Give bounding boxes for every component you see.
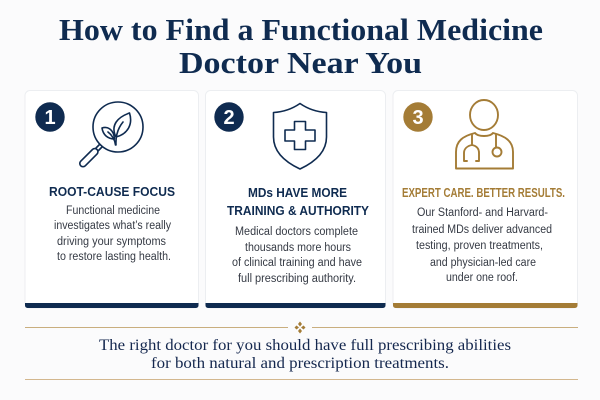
card background [393, 90, 578, 308]
number badge 2: 2 [223, 107, 235, 129]
number badge 1: 1 [44, 107, 56, 129]
number badge 3 [403, 102, 433, 132]
title: Doctor Near You [179, 45, 422, 80]
closing statement: The right doctor for you should have full prescribing abilities [99, 337, 511, 354]
body text: Medical doctors complete [235, 226, 358, 238]
body text [412, 207, 552, 284]
closing statement: for both natural and prescription treatments. [151, 355, 449, 372]
body text: full prescribing authority. [238, 273, 356, 285]
heading: TRAINING & AUTHORITY [227, 204, 370, 218]
body text: and physician-led care [430, 257, 536, 269]
body text: thousands more hours [245, 242, 351, 254]
body text: investigates what’s really [54, 220, 171, 232]
heading: ROOT-CAUSE FOCUS [49, 185, 175, 199]
body text [232, 226, 362, 285]
card background [25, 90, 198, 308]
icon: ornament diamond [294, 322, 306, 334]
body text: trained MDs deliver advanced [412, 224, 552, 236]
body text: Functional medicine [66, 205, 160, 217]
heading: MDs HAVE MORE [248, 186, 347, 200]
body text: to restore lasting health. [57, 251, 171, 263]
title [59, 12, 543, 80]
card bottom bar [25, 303, 198, 308]
card background [206, 90, 386, 308]
body text: Our Stanford- and Harvard- [417, 207, 548, 219]
number badge 1 [35, 102, 65, 132]
body text: testing, proven treatments, [416, 240, 543, 252]
card bottom bar [393, 303, 578, 308]
closing statement [99, 337, 511, 372]
number badge 3: 3 [412, 107, 424, 129]
panel: expert care [393, 90, 578, 308]
body text: of clinical training and have [232, 257, 362, 269]
icon: magnifying glass with leaves [78, 102, 143, 168]
body text: driving your symptoms [57, 236, 166, 248]
panel: MDs have more training [206, 90, 386, 308]
icon: doctor with stethoscope [456, 100, 513, 168]
card bottom bar [206, 303, 386, 308]
body text: under one roof. [446, 272, 518, 284]
number badge 2 [214, 102, 244, 132]
icon: shield with cross [274, 104, 326, 169]
body text [54, 205, 171, 263]
panel: root-cause focus [25, 90, 198, 308]
heading [227, 186, 370, 218]
title: How to Find a Functional Medicine [59, 12, 543, 47]
